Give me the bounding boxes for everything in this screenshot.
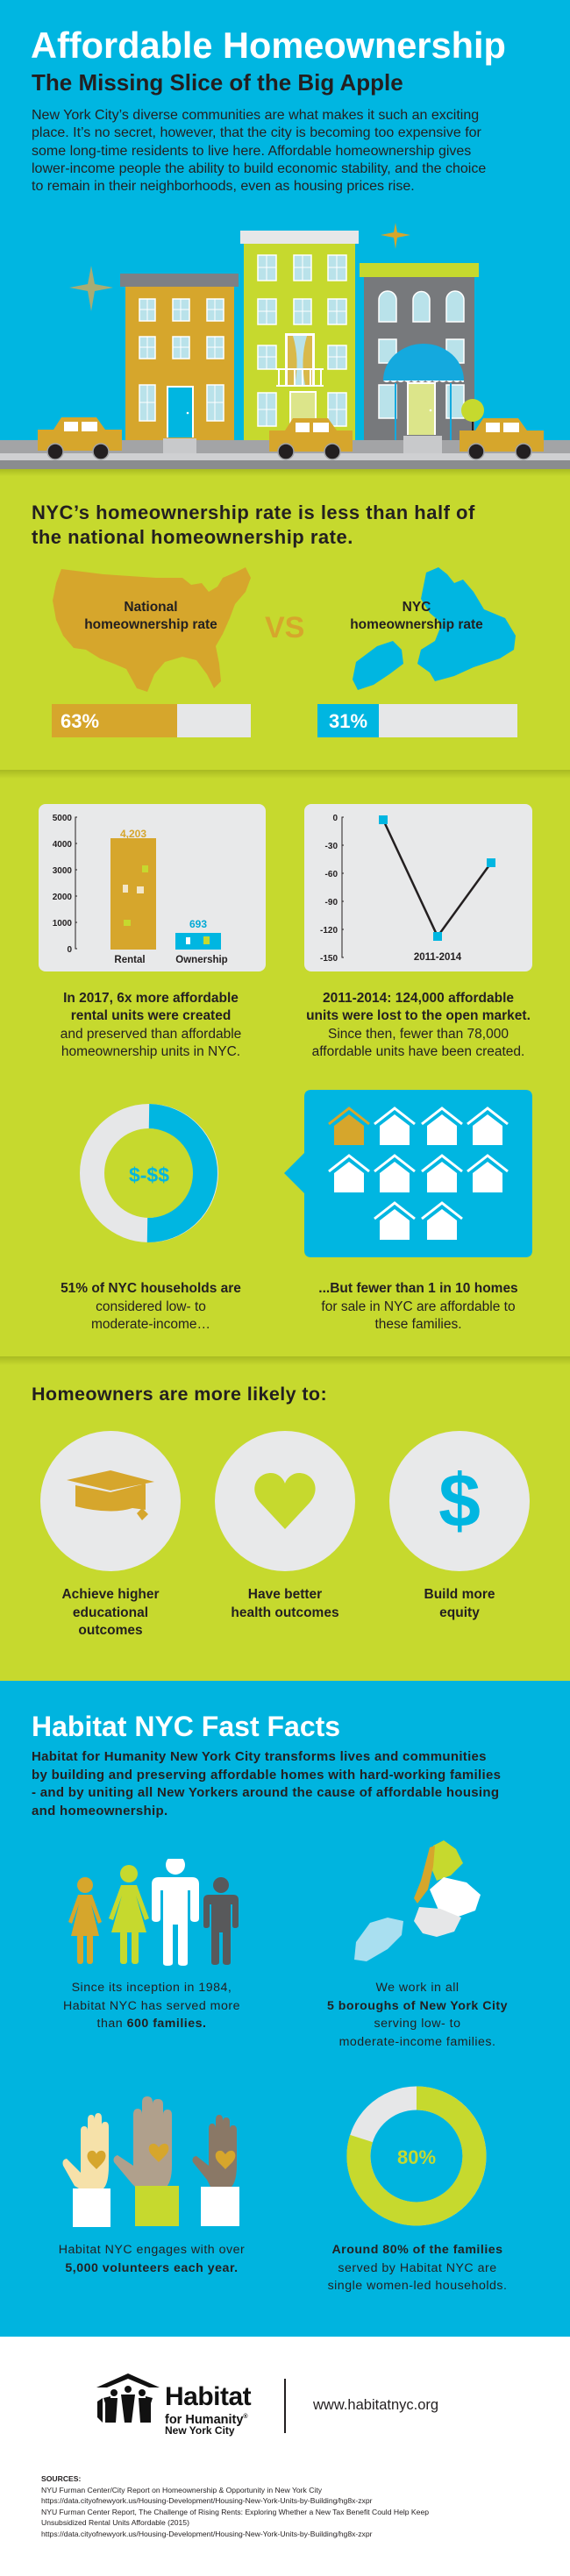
- panel: line chart units lost: -120: [320, 926, 338, 936]
- panel: line chart units lost: -90: [325, 898, 338, 907]
- icon: dollar: $: [438, 1459, 481, 1543]
- logo: habitat for humanity: New York City: [165, 2424, 235, 2437]
- text: 5 boroughs: [327, 1981, 508, 2048]
- panel: line chart units lost: -60: [325, 870, 338, 879]
- text: sources: https://data.cityofnewyork.us/Housing-Development/Housing-New-York-Units-by-Building/hg8x-zxpr: [41, 2529, 372, 2537]
- building: orange: [120, 274, 239, 440]
- text: 1 in 10 caption: ...But fewer than 1 in 10 homes: [318, 1281, 518, 1296]
- heading: homeownership rate: NYC’s homeownership rate is less than half of: [32, 502, 475, 523]
- illustration: city street: [0, 223, 570, 469]
- text: 600 families: Since its inception in 1984,: [72, 1981, 232, 1995]
- bar: national 63%: 63%: [61, 710, 99, 732]
- vs label: VS: [265, 611, 304, 644]
- text: 600 families: [63, 1981, 240, 2031]
- text: website url: www.habitatnyc.org: [313, 2397, 438, 2413]
- donut: 51% households: $-$$: [129, 1163, 169, 1186]
- text: 5,000 volunteers: Habitat NYC engages with over: [59, 2243, 245, 2257]
- intro paragraph: lower-income people the ability to build economic stability, and the choice: [32, 161, 486, 176]
- panel: bar chart rental vs ownership: 4,203: [120, 828, 146, 840]
- icon: volunteer hands: [63, 2096, 239, 2227]
- text: rental vs ownership caption: and preserved than affordable: [61, 1027, 241, 1042]
- intro paragraph: some long-time residents to live here. Affordable homeownership gives: [32, 144, 471, 159]
- label: national rate: homeownership rate: [84, 617, 217, 632]
- text: units lost caption: [306, 991, 531, 1059]
- intro paragraph: place. It’s no secret, however, that the city is becoming too expensive for: [32, 125, 481, 140]
- panel: bar chart rental vs ownership: 2000: [53, 893, 72, 902]
- logo: habitat for humanity: Habitat: [165, 2382, 251, 2411]
- label: national rate: National: [124, 600, 178, 615]
- cars: [38, 417, 544, 459]
- label: educational outcomes: Achieve higher: [61, 1587, 160, 1602]
- text: 5,000 volunteers: [59, 2243, 245, 2274]
- section: green statistics background: [0, 469, 570, 1681]
- icon: graduation cap: [40, 1431, 181, 1571]
- label: equity: equity: [439, 1605, 480, 1620]
- panel: line chart units lost: 0: [332, 814, 338, 823]
- label: educational outcomes: outcomes: [78, 1623, 143, 1638]
- intro paragraph: [32, 108, 486, 194]
- text: 5 boroughs: We work in all: [375, 1981, 460, 1995]
- label: NYC rate: homeownership rate: [350, 617, 483, 632]
- text: 80% caption: served by Habitat NYC are: [338, 2260, 497, 2274]
- text: 600 families: than 600 families.: [97, 2017, 206, 2031]
- label: health outcomes: health outcomes: [231, 1605, 339, 1620]
- text: units lost caption: units were lost to the open market.: [306, 1008, 531, 1023]
- text: rental vs ownership caption: homeownership units in NYC.: [61, 1044, 240, 1059]
- title: Affordable Homeownership: [31, 25, 506, 66]
- text: habitat intro: Habitat for Humanity New York City transforms lives and communities: [32, 1749, 487, 1764]
- map: USA: [53, 567, 251, 692]
- text: rental vs ownership caption: rental units were created: [71, 1008, 231, 1023]
- text: 51% caption: 51% of NYC households are: [61, 1281, 241, 1296]
- label: NYC rate: NYC: [403, 600, 431, 615]
- bar: NYC 31%: [317, 704, 517, 737]
- text: 51% caption: [61, 1281, 241, 1332]
- star: large: [69, 266, 113, 311]
- icon: heart: [215, 1431, 355, 1571]
- map: NYC: [353, 567, 516, 690]
- label: health outcomes: Have better: [248, 1587, 322, 1602]
- section: fast facts background: [0, 1681, 570, 2337]
- icon: dollar: [389, 1431, 530, 1571]
- text: 51% caption: considered low- to: [96, 1299, 206, 1313]
- panel: bar chart rental vs ownership: Rental: [114, 955, 146, 965]
- text: 5 boroughs: moderate-income families.: [339, 2034, 495, 2048]
- text: 5 boroughs: serving low- to: [374, 2017, 460, 2031]
- text: habitat intro: - and by uniting all New Yorkers around the cause of affordable housing: [32, 1785, 499, 1800]
- heading: homeownership rate: [32, 502, 475, 548]
- panel: line chart units lost: 2011-2014: [414, 952, 462, 963]
- text: rental vs ownership caption: [61, 991, 241, 1059]
- intro paragraph: New York City’s diverse communities are what makes it such an exciting: [32, 108, 479, 123]
- text: habitat intro: [32, 1749, 501, 1818]
- text: sources: Unsubsidized Rental Units Affordable (2015): [41, 2518, 189, 2527]
- text: sources: [41, 2474, 429, 2537]
- heading: homeownership rate: the national homeownership rate.: [32, 526, 353, 548]
- building: green: [240, 231, 359, 440]
- donut: 80% single women-led: [346, 2087, 486, 2225]
- text: 5,000 volunteers: 5,000 volunteers each year.: [65, 2260, 239, 2274]
- label: educational outcomes: educational: [73, 1605, 148, 1620]
- label: health outcomes: [231, 1587, 339, 1620]
- text: habitat intro: by building and preserving affordable homes with hard-working families: [32, 1768, 501, 1782]
- label: national rate: [84, 600, 217, 632]
- panel: bar chart rental vs ownership: Ownership: [175, 955, 228, 965]
- callout: houses affordable: [284, 1090, 532, 1257]
- building: gray: [360, 263, 484, 445]
- text: sources: NYU Furman Center/City Report on Homeownership & Opportunity in New York City: [41, 2485, 322, 2494]
- panel: bar chart rental vs ownership: 1000: [53, 919, 72, 929]
- panel: bar chart rental vs ownership: 5000: [53, 814, 72, 823]
- panel: line chart units lost: [304, 804, 532, 971]
- map: five boroughs: [354, 1840, 481, 1961]
- text: 80% caption: single women-led households.: [328, 2279, 507, 2293]
- text: units lost caption: Since then, fewer than 78,000: [328, 1027, 509, 1042]
- text: sources: https://data.cityofnewyork.us/Housing-Development/Housing-New-York-Units-by-Building/hg8x-zxpr: [41, 2496, 372, 2505]
- label: equity: Build more: [424, 1587, 495, 1602]
- donut: 51% households: [80, 1104, 218, 1242]
- text: 51% caption: moderate-income…: [91, 1317, 210, 1332]
- sidewalk and street: [0, 436, 570, 469]
- panel: line chart units lost: -150: [320, 954, 338, 964]
- logo: habitat for humanity: [96, 2373, 251, 2437]
- text: 80% caption: Around 80% of the families: [331, 2243, 503, 2257]
- panel: bar chart rental vs ownership: [39, 804, 266, 971]
- panel: bar chart rental vs ownership: 3000: [53, 866, 72, 876]
- heading: homeowners more likely: Homeowners are more likely to:: [32, 1384, 327, 1405]
- text: sources: NYU Furman Center Report, The Challenge of Rising Rents: Exploring Whether a New Tax Benefit Could Help Keep: [41, 2508, 429, 2516]
- text: 600 families: Habitat NYC has served more: [63, 1999, 240, 2013]
- text: habitat intro: and homeownership.: [32, 1803, 167, 1818]
- text: 1 in 10 caption: [318, 1281, 518, 1332]
- star: gold: [381, 223, 410, 249]
- text: sources: SOURCES:: [41, 2474, 81, 2483]
- logo: habitat for humanity: for Humanity®: [165, 2413, 248, 2427]
- bar: NYC 31%: 31%: [329, 710, 367, 732]
- panel: bar chart rental vs ownership: 4000: [53, 840, 72, 850]
- text: 80% caption: [328, 2243, 507, 2293]
- text: 5 boroughs: 5 boroughs of New York City: [327, 1999, 508, 2013]
- label: equity: [424, 1587, 495, 1620]
- text: rental vs ownership caption: In 2017, 6x more affordable: [63, 991, 239, 1006]
- panel: bar chart rental vs ownership: 0: [67, 945, 72, 955]
- subtitle: The Missing Slice of the Big Apple: [32, 69, 403, 96]
- section: header background: [0, 0, 570, 469]
- donut: 80% single women-led: 80%: [397, 2146, 436, 2168]
- bar: national 63%: [52, 704, 251, 737]
- label: NYC rate: [350, 600, 483, 632]
- panel: line chart units lost: -30: [325, 842, 338, 851]
- text: units lost caption: 2011-2014: 124,000 affordable: [323, 991, 514, 1006]
- label: educational outcomes: [61, 1587, 160, 1638]
- text: 1 in 10 caption: for sale in NYC are affordable to: [321, 1299, 516, 1313]
- heading: fast facts: Habitat NYC Fast Facts: [32, 1711, 340, 1742]
- text: 1 in 10 caption: these families.: [374, 1317, 462, 1332]
- text: units lost caption: affordable units have been created.: [312, 1044, 524, 1059]
- panel: bar chart rental vs ownership: 693: [189, 918, 207, 930]
- icon: family people: [68, 1859, 239, 1966]
- intro paragraph: to remain in their neighborhoods, even as housing prices rise.: [32, 179, 415, 194]
